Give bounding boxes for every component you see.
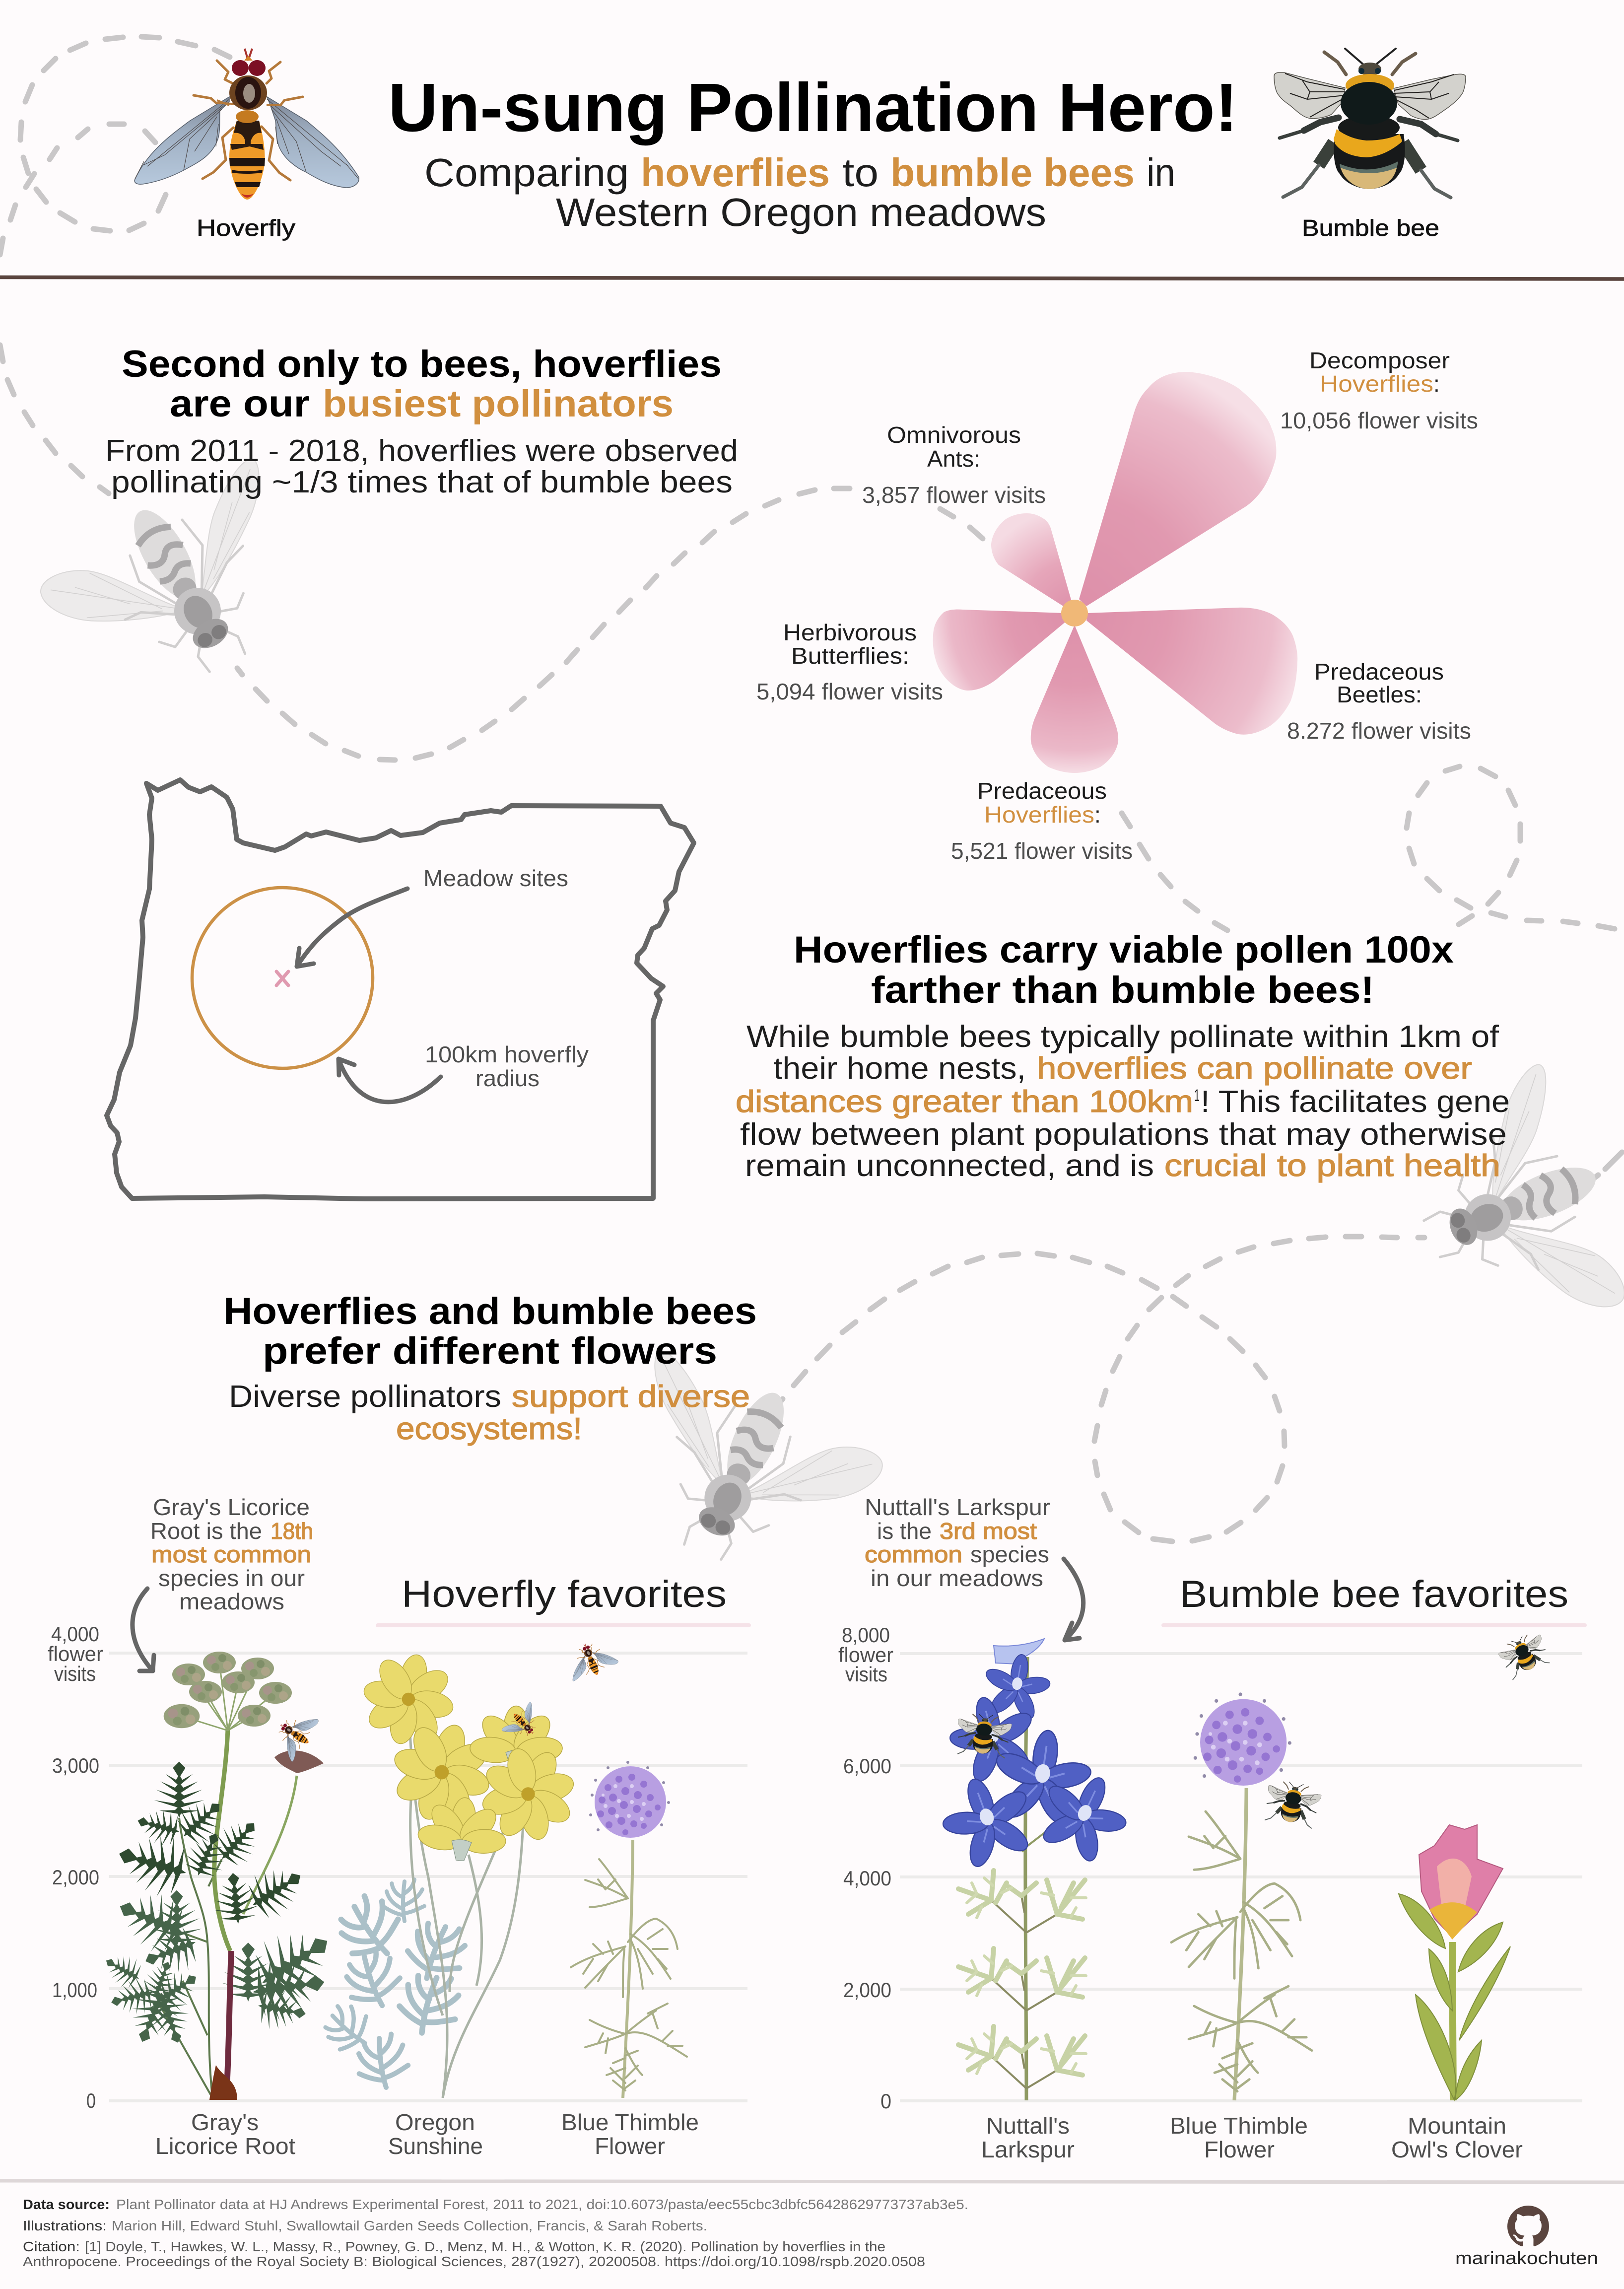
label: predaceous beetles: Beetles: bbox=[1337, 682, 1422, 707]
petal: omnivorous ants bbox=[991, 513, 1072, 609]
y axis labels: 4,000 bbox=[51, 1622, 99, 1646]
small bumble bee: on thimble bbox=[1263, 1779, 1323, 1829]
small bumble bee: on larkspur bbox=[955, 1712, 1013, 1758]
text: observations: pollinating ~1/3 times that of bumble bees bbox=[111, 465, 733, 499]
y axis labels: 6,000 bbox=[843, 1754, 891, 1778]
y axis labels bbox=[48, 1622, 103, 2112]
y axis labels: visits bbox=[54, 1662, 96, 1685]
label: radius bbox=[425, 1041, 589, 1091]
small hoverfly: on sunshine bbox=[500, 1700, 547, 1747]
clover leaves bbox=[1399, 1894, 1510, 2100]
text: pollen distance body: 1 bbox=[1194, 1086, 1200, 1105]
licorice upper leaves bbox=[111, 1762, 314, 1927]
text: different flowers body: Diverse pollinators bbox=[229, 1380, 501, 1414]
licorice umbel rays bbox=[182, 1663, 275, 1731]
flight path: left wave to flower bbox=[0, 345, 983, 760]
label: omnivorous ants bbox=[862, 422, 1046, 508]
illustration: bumble bee bbox=[1274, 49, 1466, 198]
callout: larkspur: common bbox=[865, 1541, 962, 1567]
subtitle: to bbox=[842, 150, 879, 195]
plant: gray's licorice root bbox=[98, 1652, 346, 2100]
text: pollen distance body: flow between plant populations that may otherwise bbox=[740, 1117, 1507, 1152]
grey hoverfly: left bbox=[29, 449, 336, 727]
label: radius: 100km hoverfly bbox=[425, 1041, 589, 1067]
x axis labels: Gray's bbox=[191, 2109, 259, 2135]
title: Un-sung Pollination Hero! bbox=[388, 69, 1238, 146]
text: different flowers body: support diverse bbox=[512, 1380, 750, 1414]
plant: mountain owl's clover bbox=[1399, 1825, 1510, 2100]
footer: sources and citation: Marion Hill, Edward Stuhl, Swallowtail Garden Seeds Collection, Francis, & Sarah Roberts. bbox=[112, 2218, 707, 2233]
small hoverfly: sky bbox=[561, 1635, 620, 1684]
larkspur flowers bbox=[994, 1639, 1044, 1664]
heading: different flowers: Hoverflies and bumble bees bbox=[223, 1290, 757, 1332]
plant: nuttall's larkspur bbox=[929, 1639, 1142, 2100]
subtitle: Western Oregon meadows bbox=[556, 190, 1046, 234]
larkspur leaves bbox=[958, 1871, 1086, 1933]
text: pollen distance body: distances greater than 100km bbox=[736, 1085, 1193, 1119]
y axis labels: 3,000 bbox=[52, 1754, 99, 1777]
illustration: hoverfly bbox=[135, 49, 359, 200]
licorice lower leaves bbox=[98, 1879, 346, 2051]
header divider bbox=[0, 277, 1624, 279]
licorice lower stem bbox=[226, 1951, 231, 2098]
callout: larkspur: species bbox=[970, 1541, 1049, 1567]
callout: larkspur: in our meadows bbox=[871, 1565, 1043, 1591]
label: decomposer hoverflies: Hoverflies bbox=[1320, 371, 1433, 397]
text: pollen distance body: remain unconnected, and is bbox=[745, 1149, 1154, 1183]
subtitle: bumble bees bbox=[890, 150, 1135, 195]
arrow: to larkspur bbox=[1064, 1559, 1083, 1640]
dashed flight paths bbox=[0, 37, 1622, 1541]
label: herbivorous butterflies: 5,094 flower visits bbox=[756, 679, 943, 704]
y axis labels: 4,000 bbox=[843, 1867, 891, 1890]
licorice root bulb bbox=[209, 2065, 237, 2100]
grey hoverfly: centre bbox=[589, 1341, 892, 1607]
label: omnivorous ants: Ants: bbox=[927, 446, 980, 472]
text: pollen distance body: ! This facilitates gene bbox=[1201, 1085, 1510, 1119]
callout: larkspur: 3rd most bbox=[940, 1518, 1037, 1544]
clover bloom bbox=[1419, 1825, 1503, 1937]
grey hoverfly: right bbox=[1386, 1059, 1624, 1358]
callout: licorice root bbox=[150, 1494, 313, 1614]
larkspur stem bbox=[1025, 1657, 1027, 2100]
label: decomposer hoverflies: : bbox=[1433, 371, 1440, 397]
x axis labels bbox=[155, 2109, 699, 2159]
licorice second head bbox=[274, 1750, 324, 1773]
clover stem bbox=[1452, 1942, 1453, 2100]
licorice stems bbox=[158, 1818, 222, 2098]
small hoverfly: on licorice bbox=[267, 1704, 322, 1764]
icon: github mark bbox=[1507, 2206, 1549, 2246]
y axis labels: 2,000 bbox=[843, 1978, 891, 2002]
callout: licorice root: Gray's Licorice bbox=[153, 1494, 310, 1520]
label: bumble bee: Bumble bee bbox=[1302, 215, 1439, 241]
arrow: to licorice root bbox=[133, 1589, 154, 1671]
y axis labels: flower bbox=[838, 1643, 893, 1666]
x axis labels: Flower bbox=[595, 2133, 665, 2159]
label: radius: radius bbox=[475, 1065, 540, 1091]
label: predaceous beetles bbox=[1287, 659, 1471, 744]
footer divider bbox=[0, 2181, 1624, 2182]
x axis labels: Flower bbox=[1204, 2137, 1275, 2162]
x axis labels: Licorice Root bbox=[155, 2133, 295, 2159]
arrow: meadow sites bbox=[297, 889, 407, 967]
heading: busiest pollinators: are our bbox=[170, 383, 310, 425]
label: hoverfly: Hoverfly bbox=[197, 215, 295, 241]
subtitle: Comparing bbox=[424, 150, 629, 195]
label: predaceous hoverflies: 5,521 flower visits bbox=[951, 838, 1133, 864]
y axis labels: flower bbox=[48, 1642, 103, 1665]
petal: predaceous hoverflies bbox=[1031, 625, 1118, 773]
text: pollen distance body bbox=[736, 1020, 1510, 1183]
footer: sources and citation: Data source: bbox=[23, 2197, 110, 2212]
heading: different flowers: prefer different flowers bbox=[263, 1330, 717, 1372]
x axis labels: Mountain bbox=[1408, 2113, 1506, 2139]
arrow: radius bbox=[338, 1059, 441, 1102]
x axis labels bbox=[981, 2113, 1523, 2162]
heading: pollen distance: Hoverflies carry viable pollen 100x bbox=[794, 929, 1454, 971]
callout: licorice root: species in our bbox=[158, 1565, 305, 1591]
chart title underline bbox=[378, 1623, 749, 1627]
label: predaceous hoverflies: Predaceous bbox=[977, 778, 1107, 804]
callout: larkspur: is the bbox=[877, 1518, 932, 1544]
chart title underline bbox=[1163, 1623, 1585, 1627]
plant: blue thimble flower bbox=[1171, 1692, 1312, 2100]
callout: licorice root: 18th bbox=[271, 1518, 313, 1544]
credit: author: marinakochuten bbox=[1455, 2248, 1598, 2268]
y axis labels bbox=[838, 1623, 893, 2113]
subtitle: in bbox=[1147, 150, 1175, 195]
heading: different flowers bbox=[223, 1290, 757, 1372]
text: observations: From 2011 - 2018, hoverflies were observed bbox=[105, 434, 738, 468]
chart gridlines bbox=[109, 1653, 747, 2101]
state outline bbox=[107, 780, 694, 1199]
flight path: right loop bbox=[1122, 766, 1615, 930]
callout: licorice root: most common bbox=[151, 1541, 311, 1567]
text: pollen distance body: hoverflies can pollinate over bbox=[1037, 1051, 1472, 1086]
label: predaceous beetles: Predaceous bbox=[1314, 659, 1444, 685]
label: meadow sites: Meadow sites bbox=[423, 865, 568, 891]
label: predaceous hoverflies: : bbox=[1094, 802, 1101, 828]
label: predaceous beetles: 8.272 flower visits bbox=[1287, 718, 1471, 744]
x axis labels: Larkspur bbox=[981, 2137, 1075, 2162]
heading: pollen distance bbox=[794, 929, 1454, 1011]
small bumble bee: sky bbox=[1496, 1629, 1553, 1681]
chart: flower petals of pollinator visits bbox=[933, 372, 1297, 773]
x axis labels: Nuttall's bbox=[986, 2113, 1070, 2139]
label: herbivorous butterflies: Herbivorous bbox=[783, 620, 917, 645]
sunshine flowers bbox=[355, 1646, 462, 1753]
x axis labels: Blue Thimble bbox=[561, 2109, 699, 2135]
label: predaceous hoverflies bbox=[951, 778, 1133, 864]
petal: herbivorous butterflies bbox=[933, 610, 1067, 691]
footer: sources and citation: Citation: bbox=[23, 2239, 80, 2254]
text: pollen distance body: crucial to plant health bbox=[1164, 1149, 1500, 1183]
footer: sources and citation bbox=[23, 2197, 968, 2269]
footer: sources and citation: Anthropocene. Proceedings of the Royal Society B: Biological Sciences, 287(1927), 20200508. https://doi.org/10.1098/rspb.2020.0508 bbox=[23, 2254, 925, 2269]
plant: blue thimble flower bbox=[571, 1761, 687, 2098]
subtitle bbox=[424, 150, 1175, 234]
heading: busiest pollinators: Second only to bees, hoverflies bbox=[122, 343, 722, 385]
chart gridlines bbox=[900, 1654, 1582, 2101]
footer: sources and citation: [1] Doyle, T., Hawkes, W. L., Massy, R., Powney, G. D., Menz, M. H., & Wotton, K. R. (2020). Pollination by hoverflies in the bbox=[85, 2239, 885, 2254]
plant: oregon sunshine bbox=[317, 1646, 592, 2098]
callout: licorice root: Root is the bbox=[150, 1518, 262, 1544]
flower centre bbox=[1061, 600, 1088, 626]
text: different flowers body: ecosystems! bbox=[396, 1412, 582, 1446]
larkspur branch stems bbox=[1003, 1827, 1052, 1852]
footer: sources and citation: Plant Pollinator data at HJ Andrews Experimental Forest, 2011 to 2021, doi:10.6073/pasta/eec55cbc3dbfc56428629773737ab3e5. bbox=[116, 2197, 968, 2212]
flight path: lower loop bbox=[774, 1152, 1622, 1541]
callout: licorice root: meadows bbox=[179, 1589, 284, 1614]
sunshine stems bbox=[409, 1722, 523, 2098]
y axis labels: 8,000 bbox=[842, 1623, 890, 1647]
y axis labels: visits bbox=[845, 1663, 887, 1686]
map: Oregon bbox=[107, 780, 694, 1199]
text: pollen distance body: While bumble bees typically pollinate within 1km of bbox=[746, 1020, 1499, 1054]
heading: busiest pollinators: busiest pollinators bbox=[323, 383, 674, 425]
panel: bumble bee favorites chart bbox=[838, 1494, 1585, 2162]
label: omnivorous ants: Omnivorous bbox=[887, 422, 1021, 448]
100km radius circle bbox=[192, 888, 373, 1068]
y axis labels: 1,000 bbox=[52, 1978, 97, 2002]
licorice flower clusters bbox=[172, 1664, 205, 1685]
callout: larkspur bbox=[865, 1494, 1050, 1591]
petal: predaceous beetles bbox=[1086, 608, 1297, 735]
flight path: top-left loop bbox=[0, 37, 230, 255]
panel: hoverfly favorites chart bbox=[48, 1494, 749, 2159]
label: decomposer hoverflies bbox=[1280, 347, 1478, 433]
y axis labels: 0 bbox=[86, 2089, 96, 2112]
label: omnivorous ants: 3,857 flower visits bbox=[862, 482, 1046, 508]
subtitle: hoverflies bbox=[641, 150, 830, 195]
text: pollen distance body: their home nests, bbox=[773, 1051, 1026, 1086]
label: herbivorous butterflies bbox=[756, 620, 943, 704]
text: observations bbox=[105, 434, 738, 499]
text: different flowers body bbox=[229, 1380, 750, 1446]
meadow site marker bbox=[276, 971, 288, 985]
y axis labels: 2,000 bbox=[52, 1866, 99, 1889]
x axis labels: Blue Thimble bbox=[1170, 2113, 1308, 2139]
petal: decomposer hoverflies bbox=[1079, 372, 1276, 606]
x axis labels: Oregon bbox=[395, 2109, 475, 2135]
heading: busiest pollinators bbox=[122, 343, 722, 425]
label: herbivorous butterflies: Butterflies: bbox=[791, 643, 909, 669]
label: predaceous hoverflies: Hoverflies bbox=[984, 802, 1094, 828]
sunshine leaves bbox=[330, 1888, 410, 1970]
chart title: Hoverfly favorites bbox=[402, 1573, 727, 1615]
label: decomposer hoverflies: 10,056 flower visits bbox=[1280, 408, 1478, 433]
callout: larkspur: Nuttall's Larkspur bbox=[865, 1494, 1050, 1520]
heading: pollen distance: farther than bumble bees! bbox=[871, 969, 1374, 1011]
label: decomposer hoverflies: Decomposer bbox=[1309, 347, 1450, 373]
footer: sources and citation: Illustrations: bbox=[23, 2218, 107, 2233]
x axis labels: Owl's Clover bbox=[1391, 2137, 1523, 2162]
chart title: Bumble bee favorites bbox=[1180, 1573, 1568, 1615]
x axis labels: Sunshine bbox=[388, 2133, 483, 2159]
y axis labels: 0 bbox=[880, 2089, 891, 2113]
